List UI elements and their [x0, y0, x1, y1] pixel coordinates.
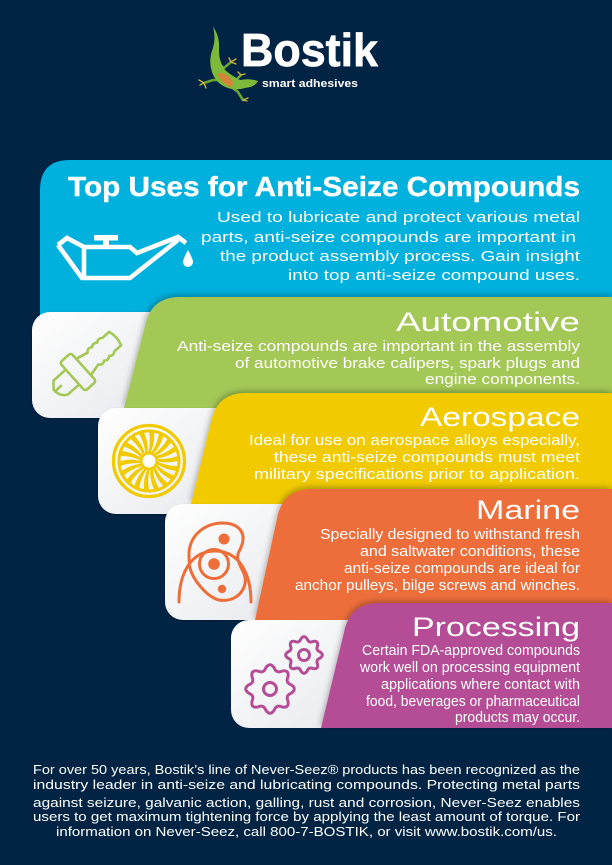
body text: food, beverages or pharmaceutical — [366, 694, 580, 710]
intro text: into top anti-seize compound uses. — [288, 268, 580, 284]
intro text: the product assembly process. Gain insight — [220, 249, 580, 265]
panel: aerospace — [98, 393, 612, 514]
heading: Marine — [476, 495, 580, 525]
body text: these anti-seize compounds must meet — [274, 450, 580, 466]
body text: Certain FDA-approved compounds — [362, 643, 580, 659]
tagline: smart adhesives — [262, 78, 358, 90]
panel: processing — [231, 603, 612, 728]
panel: intro — [40, 160, 612, 330]
panel: automotive — [32, 297, 612, 418]
heading: Processing — [412, 612, 580, 642]
green panel — [124, 297, 612, 408]
body text: of automotive brake calipers, spark plugs and — [235, 356, 580, 372]
body text — [359, 643, 580, 726]
icon card: pulley — [165, 504, 305, 620]
body text: Specially designed to withstand fresh — [320, 527, 580, 543]
body text: engine components. — [425, 372, 580, 388]
icon card: gears — [231, 620, 371, 728]
icon card: spark plug — [32, 312, 172, 418]
body text: products may occur. — [455, 710, 580, 726]
wordmark: Bostik — [241, 24, 378, 76]
body text: and saltwater conditions, these — [360, 544, 580, 560]
body text: work well on processing equipment — [359, 660, 580, 676]
title: Top Uses for Anti-Seize Compounds — [68, 171, 580, 202]
body text — [249, 433, 580, 483]
panel: marine — [165, 489, 612, 620]
body text: military specifications prior to application. — [254, 467, 580, 483]
orange panel — [255, 489, 612, 620]
footer text: users to get maximum tightening force by applying the least amount of torque. For — [33, 810, 580, 824]
body text — [295, 527, 580, 594]
icon: gecko — [199, 27, 258, 101]
intro text — [201, 210, 580, 284]
footer text: information on Never-Seez, call 800-7-BOSTIK, or visit www.bostik.com/us. — [56, 825, 557, 839]
footer text: against seizure, galvanic action, galling, rust and corrosion, Never-Seez enables — [33, 796, 580, 810]
body text: anti-seize compounds are ideal for — [344, 561, 580, 577]
body text: anchor pulleys, bilge screws and winches. — [295, 578, 580, 594]
footer text: industry leader in anti-seize and lubricating compounds. Protecting metal parts — [33, 778, 580, 792]
purple panel — [321, 603, 612, 728]
body text: applications where contact with — [381, 677, 580, 693]
icon: oil can — [58, 235, 193, 278]
body text: Ideal for use on aerospace alloys especially, — [249, 433, 580, 449]
logo: Bostik — [199, 24, 378, 101]
heading: Automotive — [396, 307, 580, 337]
yellow panel — [191, 393, 612, 504]
intro text: Used to lubricate and protect various metal — [217, 210, 580, 226]
intro text: parts, anti-seize compounds are important in — [201, 230, 576, 246]
heading: Aerospace — [420, 402, 580, 432]
footer text: For over 50 years, Bostik’s line of Never-Seez® products has been recognized as the — [33, 763, 580, 777]
icon card: turbine — [98, 408, 238, 514]
body text — [177, 339, 581, 388]
body text: Anti-seize compounds are important in the assembly — [177, 339, 581, 355]
footer text — [33, 763, 580, 839]
